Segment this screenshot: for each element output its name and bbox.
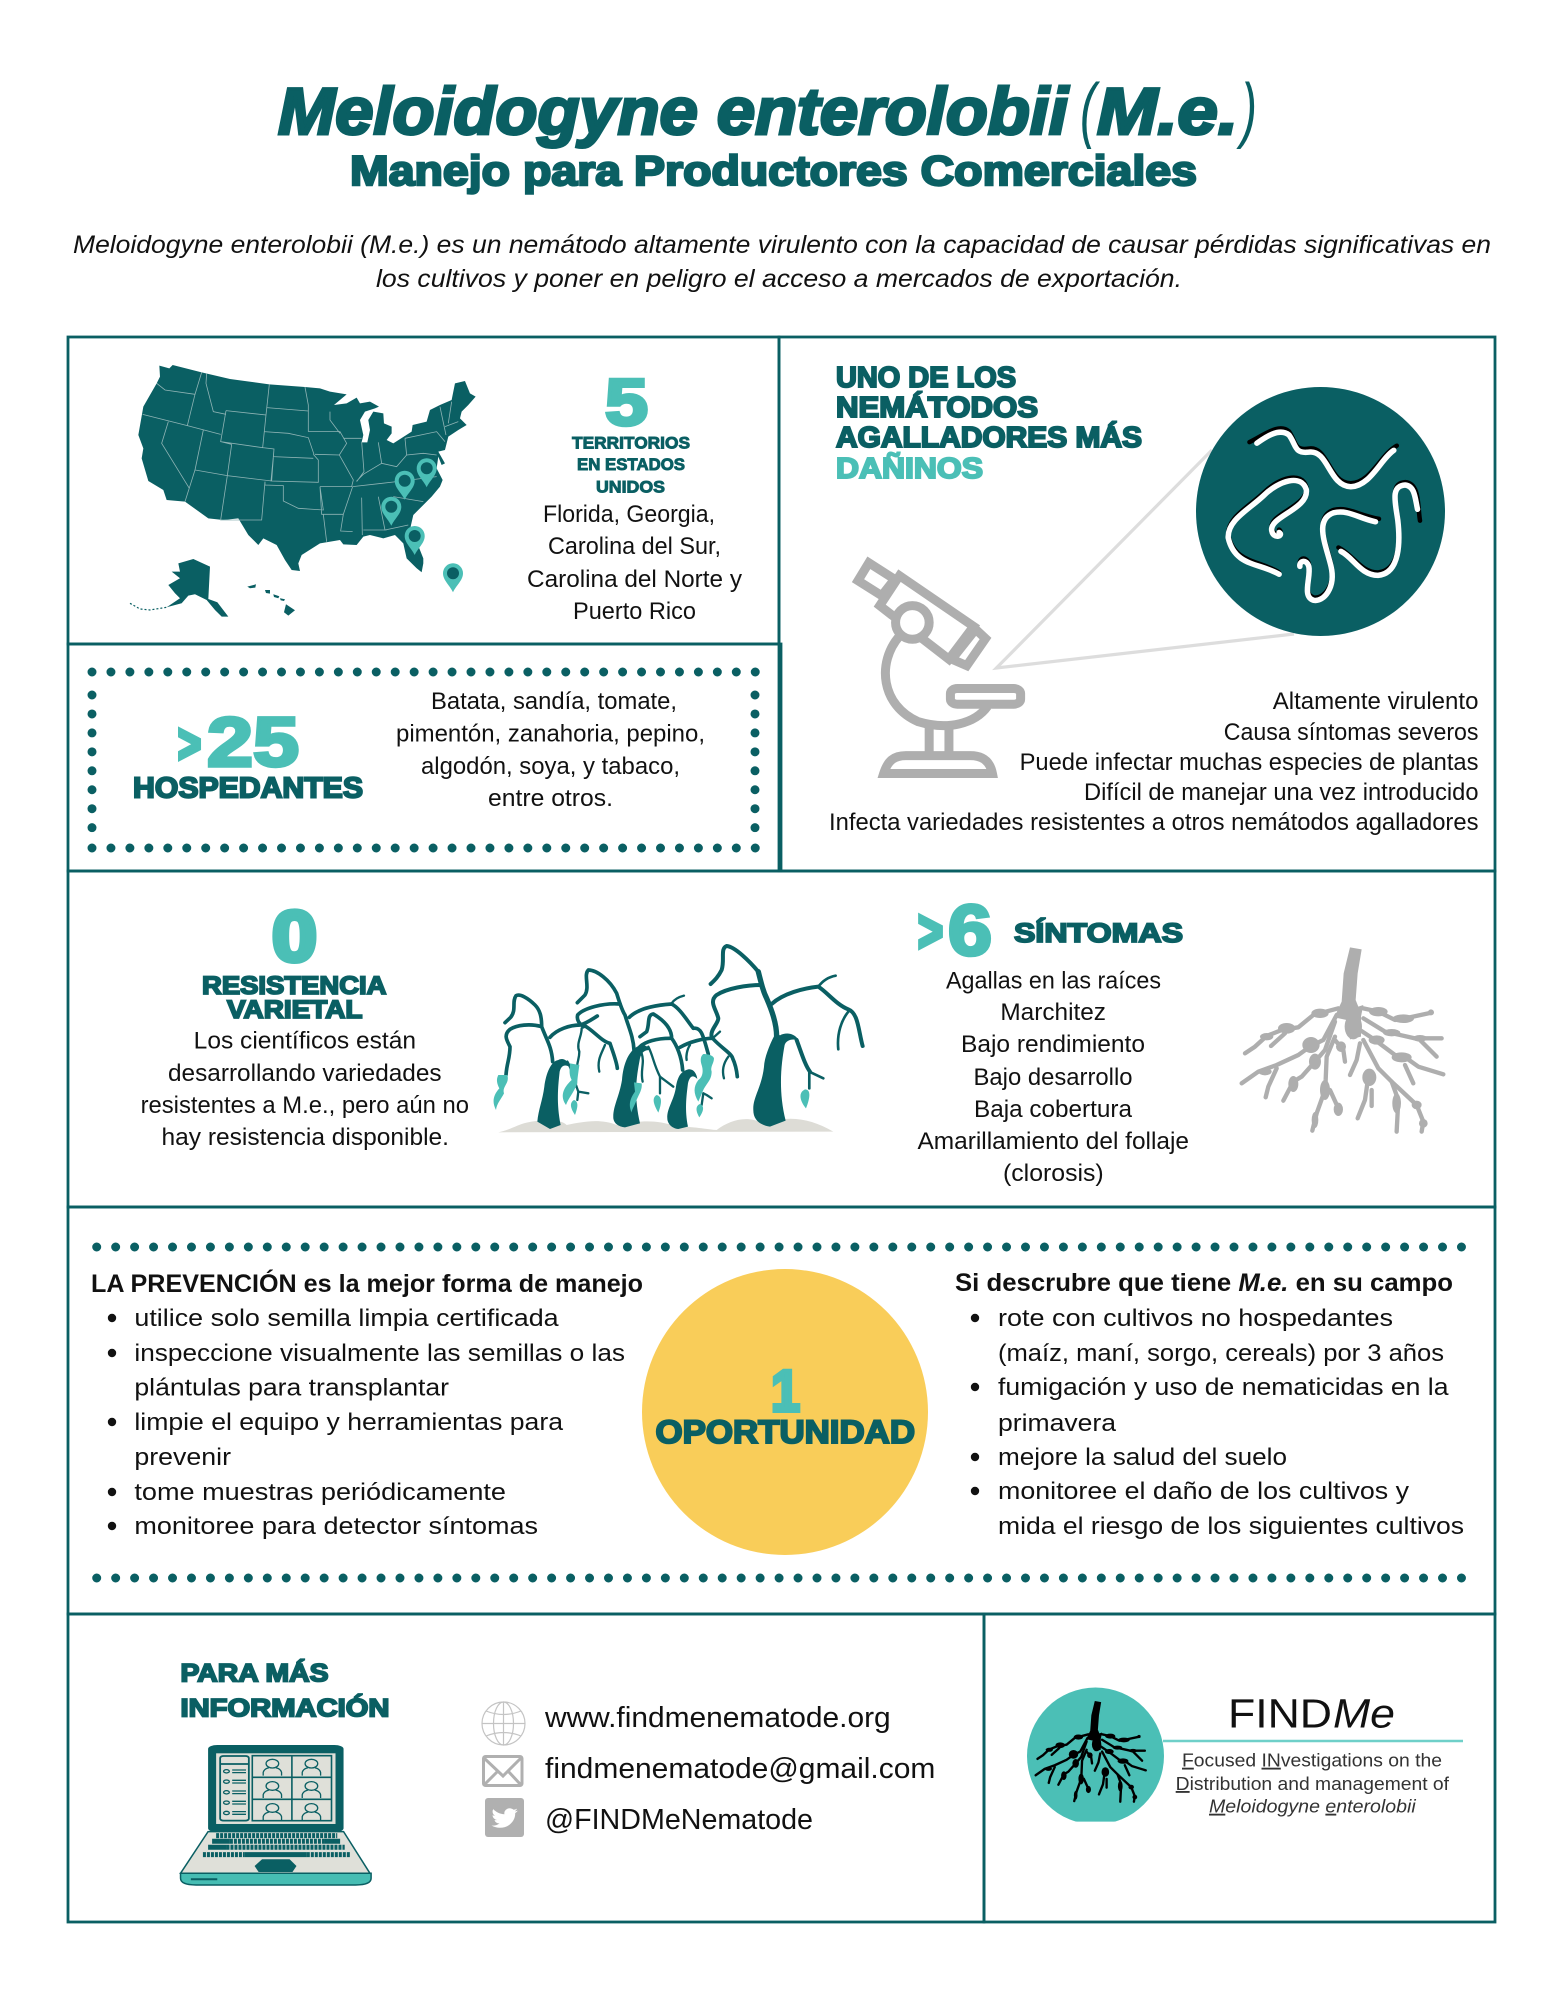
logo rule (1163, 1740, 1463, 1742)
hosts list: Batata, sandía, tomate, (431, 688, 677, 715)
heading: NEMÁTODOS (836, 390, 1038, 424)
panel: prevention and management (68, 1207, 1495, 1614)
symptoms list: Marchitez (1000, 999, 1106, 1026)
prevention list: prevenir (134, 1444, 231, 1471)
title: abbreviation (1080, 70, 1257, 150)
panel: territories (68, 337, 779, 644)
magnification beam (996, 450, 1294, 668)
contact: website: www.findmenematode.org (544, 1702, 891, 1734)
prevention list: monitoree para detector síntomas (134, 1513, 538, 1540)
intro text: Meloidogyne enterolobii (M.e.) es un nemátodo altamente virulento con la capacidad de causar pérdidas significativas en (73, 231, 1491, 259)
management list: mejore la salud del suelo (998, 1444, 1287, 1471)
heading (180, 1659, 390, 1723)
hosts list: entre otros. (488, 785, 613, 812)
characteristics list: Puede infectar muchas especies de plantas (1020, 749, 1478, 776)
prevention list (108, 1305, 625, 1540)
logo tagline (1176, 1750, 1450, 1817)
icon: globe (482, 1702, 525, 1745)
management list (971, 1305, 1464, 1540)
symptoms list: Baja cobertura (974, 1096, 1133, 1123)
management list: fumigación y uso de nematicidas en la (998, 1374, 1449, 1401)
Alaska (167, 559, 228, 617)
opportunity circle (642, 1269, 928, 1555)
resistance text (141, 1028, 469, 1151)
label: opportunity: OPORTUNIDAD (656, 1414, 915, 1450)
label: territories: EN ESTADOS (577, 455, 685, 474)
intro text (73, 231, 1491, 293)
territories list: Carolina del Sur, (548, 533, 721, 560)
hosts list: pimentón, zanahoria, pepino, (396, 720, 705, 748)
logo circle with roots (1027, 1688, 1164, 1824)
heading: PARA MÁS (180, 1659, 328, 1688)
dotted border (92, 672, 756, 848)
dotted divider top (97, 1242, 1462, 1252)
intro text: los cultivos y poner en peligro el acceso a mercados de exportación. (376, 265, 1182, 293)
label: varietal resistance: VARIETAL (227, 996, 362, 1024)
resistance text: hay resistencia disponible. (162, 1124, 449, 1151)
location pins (381, 458, 463, 592)
logo tagline: Meloidogyne enterolobii (1209, 1796, 1417, 1817)
resistance text: desarrollando variedades (168, 1060, 442, 1087)
characteristics list: Causa síntomas severos (1224, 719, 1478, 746)
number: more than 25 (178, 703, 299, 781)
prevention list: inspeccione visualmente las semillas o las (134, 1340, 625, 1367)
icon: microscope (858, 563, 1021, 774)
title: abbreviation: M.e. (1097, 74, 1238, 148)
panel: FINDMe logo (984, 1614, 1495, 1922)
nematode circle (1196, 387, 1445, 636)
symptoms list: Bajo desarrollo (974, 1064, 1132, 1091)
panel: most damaging nematodes (779, 337, 1495, 871)
symptoms list: (clorosis) (1003, 1160, 1104, 1187)
label: territories: TERRITORIOS (572, 434, 690, 452)
number: more than 6: > (918, 899, 943, 964)
number: 0: 0 (272, 898, 317, 977)
icon: twitter (485, 1798, 524, 1837)
icon: laptop (181, 1745, 371, 1885)
heading: AGALLADORES MÁS (836, 420, 1142, 454)
management list: (maíz, maní, sorgo, cereals) por 3 años (998, 1340, 1444, 1367)
title: species name: Meloidogyne enterolobii (278, 74, 1070, 148)
prevention list: utilice solo semilla limpia certificada (134, 1305, 559, 1332)
title: abbreviation: ( (1080, 70, 1101, 150)
characteristics list: Altamente virulento (1273, 688, 1478, 715)
management list: monitoree el daño de los cultivos y (998, 1478, 1409, 1505)
territories list: Puerto Rico (573, 598, 696, 625)
prevention list: tome muestras periódicamente (134, 1479, 506, 1506)
number: more than 6 (918, 892, 992, 971)
Aleutian islands (130, 603, 167, 610)
resistance text: Los científicos están (194, 1028, 416, 1054)
nematode worms (1228, 428, 1420, 600)
hosts list (396, 688, 705, 812)
number: 1: 1 (771, 1359, 800, 1424)
label: symptoms: SÍNTOMAS (1014, 917, 1183, 948)
heading: DAÑINOS (836, 451, 983, 485)
icon: envelope (484, 1756, 522, 1786)
label: varietal resistance: RESISTENCIA (202, 972, 386, 1000)
management list: rote con cultivos no hospedantes (998, 1305, 1393, 1332)
label: territories: UNIDOS (596, 478, 665, 496)
logo tagline: Distribution and management of (1176, 1773, 1450, 1794)
panel: hosts (68, 644, 781, 871)
illustration: galled root (1242, 947, 1443, 1132)
subtitle: Manejo para Productores Comerciales (350, 147, 1197, 194)
prevention heading: LA PREVENCIÓN es la mejor forma de manejo (91, 1268, 643, 1298)
hosts list: algodón, soya, y tabaco, (421, 753, 680, 780)
contact: twitter handle: @FINDMeNematode (545, 1804, 813, 1836)
symptoms list: Bajo rendimiento (961, 1031, 1145, 1058)
prevention list: plántulas para transplantar (134, 1374, 449, 1402)
management list: mida el riesgo de los siguientes cultivos (998, 1513, 1464, 1540)
logo name: FIND (1228, 1691, 1332, 1737)
symptoms list (918, 968, 1189, 1187)
dotted divider bottom (97, 1574, 1462, 1582)
prevention list: limpie el equipo y herramientas para (134, 1409, 564, 1436)
panel: resistance and symptoms (68, 871, 1495, 1207)
contact: email: findmenematode@gmail.com (545, 1753, 935, 1785)
characteristics list: Difícil de manejar una vez introducido (1084, 779, 1478, 806)
map of United States (130, 365, 476, 617)
label: varietal resistance (202, 972, 386, 1024)
heading: INFORMACIÓN (180, 1693, 390, 1723)
management list: primavera (998, 1410, 1117, 1437)
heading (836, 362, 1142, 485)
heading: UNO DE LOS (836, 362, 1016, 394)
label: territories (572, 434, 690, 496)
illustration: wilting plants (494, 946, 863, 1132)
number: more than 25: 25 (207, 703, 299, 781)
management heading: Si descrubre que tiene M.e. en su campo (955, 1269, 1453, 1297)
number: more than 25: > (178, 714, 201, 774)
panel: more information (68, 1614, 984, 1922)
Hawaii (247, 584, 295, 616)
territories list: Florida, Georgia, (543, 501, 715, 528)
resistance text: resistentes a M.e., pero aún no (141, 1092, 469, 1119)
logo name: Me (1333, 1691, 1395, 1737)
characteristics list (829, 688, 1478, 836)
characteristics list: Infecta variedades resistentes a otros nemátodos agalladores (829, 809, 1478, 836)
territories list (527, 501, 742, 625)
number: more than 6: 6 (948, 892, 992, 971)
logo tagline: Focused INvestigations on the (1182, 1750, 1442, 1771)
symptoms list: Amarillamiento del follaje (918, 1128, 1189, 1155)
label: hosts: HOSPEDANTES (133, 772, 363, 804)
title (278, 70, 1257, 150)
title: abbreviation: ) (1236, 70, 1257, 150)
symptoms list: Agallas en las raíces (946, 968, 1161, 994)
territories list: Carolina del Norte y (527, 566, 742, 593)
logo name (1228, 1691, 1395, 1737)
number: 5: 5 (605, 365, 648, 439)
